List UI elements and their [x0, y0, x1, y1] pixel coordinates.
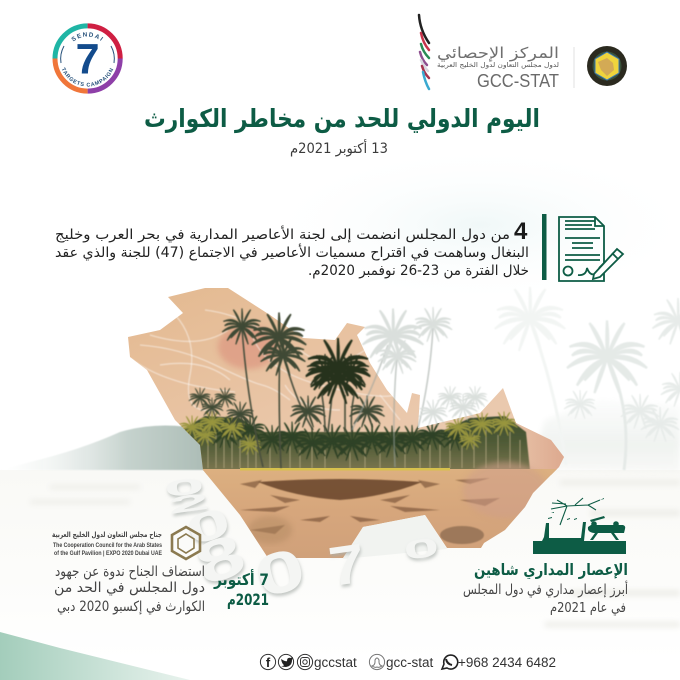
name: المركز الإحصائي	[437, 44, 559, 63]
3D numerals crossing the map: 0	[163, 473, 206, 502]
palms: faded	[352, 307, 488, 467]
palm trees	[189, 307, 488, 468]
3D numerals crossing the map: 8	[187, 522, 253, 598]
map: beach lower	[203, 469, 557, 558]
3D numerals crossing the map: 7	[325, 532, 369, 598]
callout: committee text: من دول المجلس انضمت إلى لجنة الأعاصير المدارية في بحر العرب وخليج	[55, 225, 510, 243]
icon: signed document	[559, 217, 623, 281]
phone: +968 2434 6482	[458, 655, 556, 670]
3D numerals crossing the map: 0	[402, 532, 441, 566]
map: grove crowns	[209, 415, 469, 461]
callout: committee text	[55, 218, 529, 279]
title: اليوم الدولي للحد من مخاطر الكوارث	[144, 104, 540, 134]
Sendai 7 targets campaign logo	[52, 23, 123, 94]
text block: cyclone Shaheen: في عام 2021م	[550, 600, 626, 616]
text block: pavilion seminar: الكوارث في إكسبو 2020 دبي	[57, 599, 205, 615]
text block: cyclone Shaheen: أبرز إعصار مداري في دول المجلس	[463, 580, 628, 598]
ribbon	[419, 15, 429, 89]
date: 13 أكتوبر 2021م	[290, 139, 388, 157]
map: desert upper texture	[120, 280, 570, 475]
map: grove band	[179, 410, 530, 470]
GCC-STAT logo	[419, 15, 627, 91]
torn white ground at map base	[343, 515, 447, 559]
icon: hex mark	[172, 527, 200, 559]
text block: pavilion seminar: دول المجلس في الحد من	[54, 580, 205, 596]
pavilion block: hex logo and name: of the Gulf Pavilion | EXPO 2020 Dubai UAE	[54, 550, 162, 557]
divider	[573, 47, 575, 88]
icon: whatsapp	[442, 655, 458, 669]
3D numerals crossing the map: 2	[167, 488, 211, 519]
callout: committee text: البنغال وساهمت في اقتراح مسميات الأعاصير في الاجتماع (47) للجنة والذي عقد	[55, 243, 529, 261]
icon: cyclone damage	[533, 498, 626, 554]
3D numerals crossing the map: 0	[181, 498, 236, 555]
text block: cyclone Shaheen: الإعصار المداري شاهين	[474, 561, 628, 580]
date: 7 October 2021	[213, 569, 269, 609]
palm: central large	[306, 338, 370, 404]
GCC-STAT logo: لدول مجلس التعاون لدول الخليج العربية	[437, 61, 559, 69]
text block: cyclone Shaheen	[463, 561, 628, 616]
icon: snapchat	[369, 654, 385, 670]
callout: committee text: 4	[514, 218, 528, 245]
3D numerals crossing the map	[163, 473, 441, 610]
palms: dark foreground	[242, 328, 354, 468]
icon: instagram	[297, 654, 313, 670]
green corner triangle	[0, 632, 190, 680]
icon: twitter	[278, 654, 294, 670]
handle: gccstat	[314, 655, 357, 670]
text block: pavilion seminar	[54, 564, 205, 615]
map of the GCC filled with beach photo	[120, 280, 570, 564]
date: 7 October 2021: 7 أكتوبر	[213, 569, 269, 589]
vertical green bar	[542, 214, 546, 280]
icon: facebook: f	[266, 655, 271, 670]
callout: committee text: خلال الفترة من 23-26 نوفمبر 2020م.	[308, 263, 529, 279]
handle: gcc-stat	[386, 655, 434, 670]
3D numerals crossing the map: 0	[248, 535, 312, 610]
pavilion block: hex logo and name: The Cooperation Council for the Arab States	[53, 542, 162, 549]
date: 7 October 2021: 2021م	[227, 590, 269, 609]
Sendai 7 targets campaign logo: 7	[76, 36, 100, 84]
footer: social contacts	[260, 654, 556, 670]
GCC emblem	[587, 46, 627, 86]
Sendai 7 targets campaign logo: TARGETS CAMPAIGN	[62, 67, 114, 87]
pavilion block: hex logo and name	[52, 527, 200, 559]
text block: pavilion seminar: استضاف الجناح ندوة عن جهود	[55, 564, 205, 580]
Sendai 7 targets campaign logo: SENDAI	[72, 32, 104, 42]
pavilion block: hex logo and name: جناح مجلس التعاون لدول الخليج العربية	[52, 530, 162, 539]
faded background palms at right	[495, 287, 680, 472]
icon: facebook	[260, 654, 276, 670]
GCC-STAT logo: GCC-STAT	[477, 71, 559, 91]
